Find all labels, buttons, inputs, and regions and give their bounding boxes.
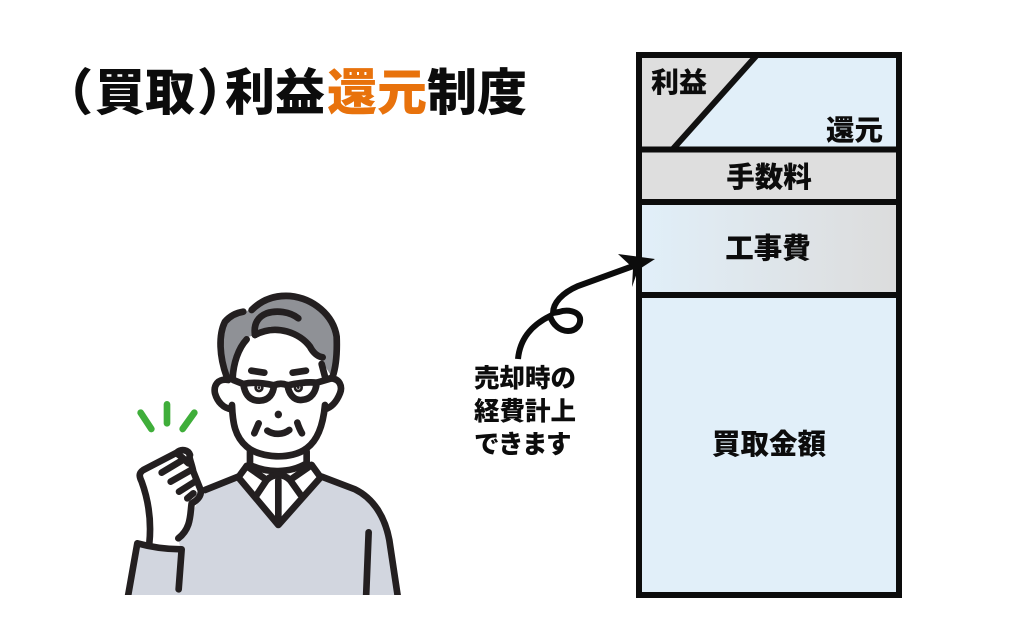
hair outline [221, 296, 337, 378]
title: 益 [275, 53, 325, 125]
title: 元 [377, 53, 427, 125]
callout text: できます [474, 431, 570, 459]
callout text: 売却時の [474, 365, 576, 393]
callout text: 経費計上 [474, 398, 576, 426]
illustration: man with raised fist [126, 296, 398, 600]
title: （ [43, 53, 93, 125]
panel: purchase amount [639, 295, 899, 595]
panel: profit and return: 還元 [826, 115, 883, 147]
panel: construction cost: 工事費 [725, 233, 811, 265]
title: 利 [225, 53, 275, 125]
title: 制 [427, 53, 477, 125]
sweater [126, 477, 398, 595]
panel: fee: 手数料 [726, 162, 812, 194]
panel: profit and return: 利益 [651, 67, 707, 98]
panel: purchase amount: 買取金額 [712, 429, 826, 461]
glasses [233, 378, 332, 401]
fist [140, 450, 201, 543]
sweater outline [127, 477, 398, 600]
title: 度 [477, 53, 527, 125]
collar and tie [238, 452, 321, 525]
callout text [474, 365, 576, 459]
title: 買 [95, 53, 145, 125]
face [215, 371, 341, 456]
hair [224, 299, 334, 375]
panel: profit and return [639, 55, 899, 150]
title: 取 [145, 53, 195, 125]
stacked price diagram [639, 55, 899, 595]
title [43, 53, 527, 125]
arrow [518, 254, 655, 359]
panel: construction cost [639, 202, 899, 295]
title: 還 [327, 53, 377, 125]
icon: green emphasis marks [141, 404, 194, 429]
title: ） [197, 53, 247, 125]
diagram outline [639, 55, 899, 595]
panel: fee [639, 150, 899, 202]
